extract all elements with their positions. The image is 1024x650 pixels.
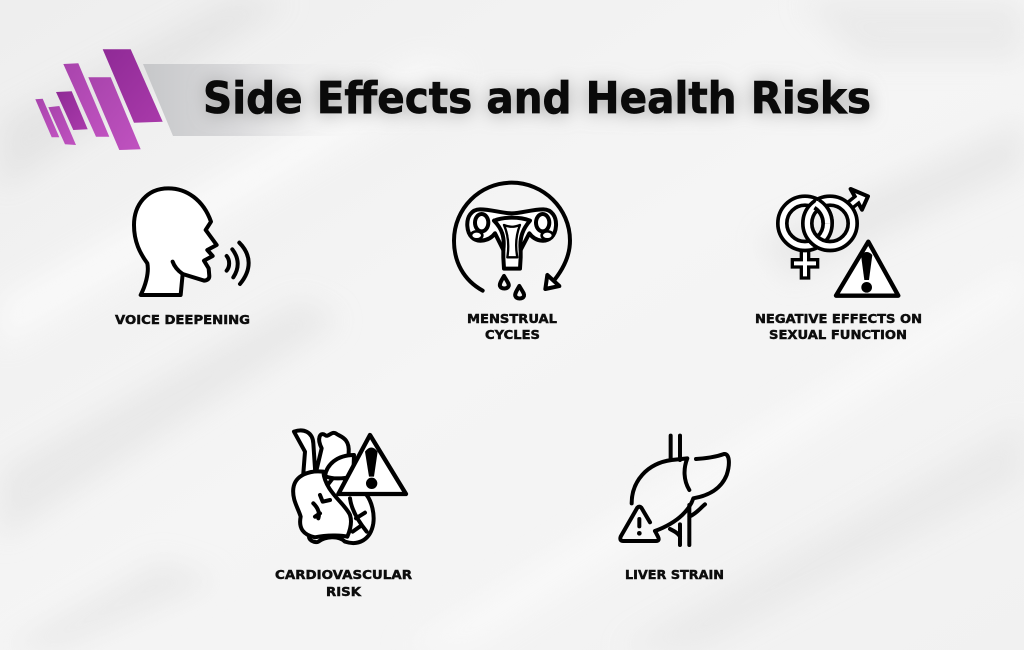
label [467,312,557,342]
item: cardiovascular risk [275,430,412,599]
item: negative effects on sexual function [755,189,922,342]
label: LIVER STRAIN [625,568,724,582]
logo: purple bars [35,49,163,150]
title banner [143,64,350,136]
icon: heart with warning [293,430,406,543]
title: Side Effects and Health Risks [203,74,871,125]
label: SEXUAL FUNCTION [769,328,907,342]
icon: gender symbols with warning [782,189,898,296]
item: voice deepening [115,188,250,327]
icon: speaking head [134,188,249,295]
item: liver strain [620,436,729,582]
label: RISK [326,585,362,599]
icon: uterus in cycle arrow [454,183,570,298]
label: VOICE DEEPENING [115,313,250,327]
item: menstrual cycles [454,183,570,342]
label [275,568,412,599]
label: CYCLES [485,328,540,342]
label [755,312,922,342]
label: MENSTRUAL [467,312,557,326]
label: NEGATIVE EFFECTS ON [755,312,922,326]
title: Side Effects and Health Risks [203,73,871,124]
icon: liver with warning [620,436,729,545]
label: CARDIOVASCULAR [275,568,412,582]
